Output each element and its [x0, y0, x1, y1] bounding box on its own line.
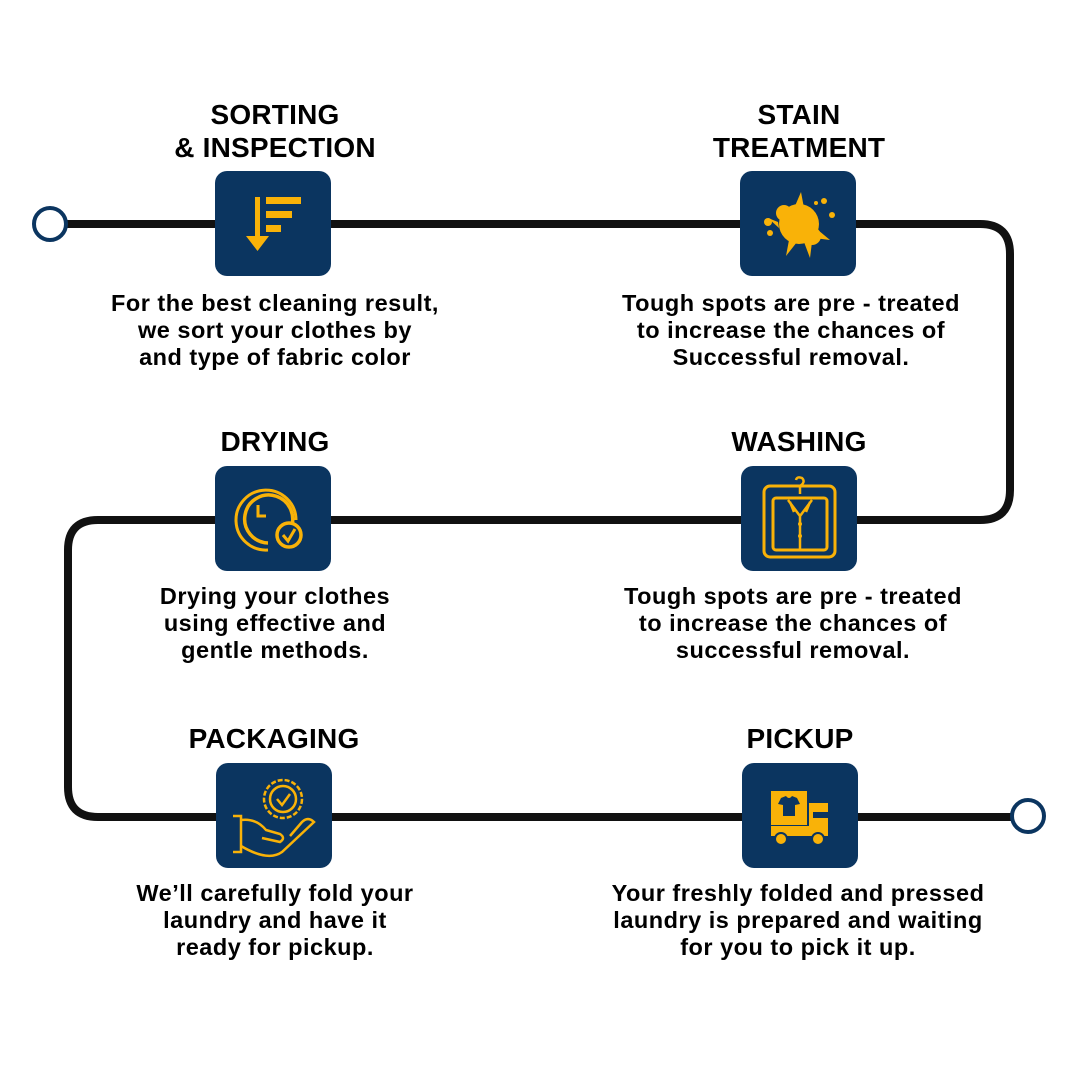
- text: pickup description: [612, 880, 984, 960]
- text: pickup description: laundry is prepared and waiting: [613, 907, 983, 933]
- text: sorting description: and type of fabric color: [139, 344, 411, 370]
- step: sorting & inspection: [111, 99, 439, 370]
- step: packaging: [136, 723, 414, 960]
- text: sorting description: we sort your clothes by: [137, 317, 412, 343]
- text: packaging description: [136, 880, 414, 960]
- step: stain treatment: [622, 99, 960, 370]
- icon: splat: [740, 171, 856, 276]
- step: pickup: [612, 723, 984, 960]
- text: drying description: Drying your clothes: [160, 583, 390, 609]
- text: sorting description: [111, 290, 439, 370]
- text: packaging description: ready for pickup.: [176, 934, 374, 960]
- icon: delivery truck: [742, 763, 858, 868]
- icon: hand with badge: [216, 763, 332, 868]
- process line: [50, 224, 1028, 817]
- start circle: [34, 208, 66, 240]
- heading: stain treatment: TREATMENT: [713, 132, 885, 163]
- icon: shirt on hanger: [741, 466, 857, 571]
- heading: drying: DRYING: [220, 426, 330, 457]
- text: stain description: [622, 290, 960, 370]
- end circle: [1012, 800, 1044, 832]
- heading: sorting: & INSPECTION: [174, 132, 376, 163]
- heading: stain treatment: STAIN: [758, 99, 840, 130]
- step: drying: [160, 426, 390, 663]
- heading: pickup: PICKUP: [746, 723, 854, 754]
- text: sorting description: For the best cleaning result,: [111, 290, 439, 316]
- text: packaging description: We’ll carefully fold your: [136, 880, 414, 906]
- text: washing description: [624, 583, 962, 663]
- heading: sorting: [174, 99, 376, 163]
- text: washing description: successful removal.: [676, 637, 910, 663]
- text: stain description: to increase the chances of: [637, 317, 945, 343]
- text: stain description: Tough spots are pre - treated: [622, 290, 960, 316]
- text: pickup description: Your freshly folded and pressed: [612, 880, 984, 906]
- text: packaging description: laundry and have it: [163, 907, 387, 933]
- heading: sorting: SORTING: [211, 99, 339, 130]
- step: washing: [624, 426, 962, 663]
- heading: washing: WASHING: [731, 426, 867, 457]
- icon: clock check: [215, 466, 331, 571]
- text: pickup description: for you to pick it up.: [680, 934, 916, 960]
- icon: sort: [215, 171, 331, 276]
- text: washing description: Tough spots are pre - treated: [624, 583, 962, 609]
- text: stain description: Successful removal.: [673, 344, 909, 370]
- heading: stain treatment: [713, 99, 885, 163]
- text: drying description: using effective and: [164, 610, 386, 636]
- text: washing description: to increase the chances of: [639, 610, 947, 636]
- text: drying description: gentle methods.: [181, 637, 369, 663]
- text: drying description: [160, 583, 390, 663]
- heading: packaging: PACKAGING: [189, 723, 359, 754]
